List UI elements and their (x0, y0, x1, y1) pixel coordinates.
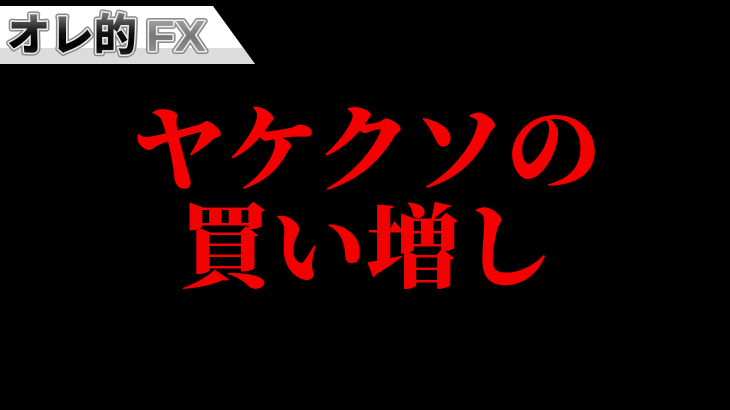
banner: series label: オレ的 (7, 11, 137, 60)
banner: series label: FX (146, 12, 206, 61)
banner: series label: オレ的 (7, 11, 137, 60)
title: 買い増し (178, 199, 554, 300)
banner: series label: オレ的 (7, 11, 137, 60)
title (131, 100, 601, 300)
banner: series label: FX (146, 12, 206, 61)
banner: series label (0, 6, 255, 64)
banner: series label: FX (146, 12, 206, 61)
title: ヤケクソの (131, 100, 601, 204)
